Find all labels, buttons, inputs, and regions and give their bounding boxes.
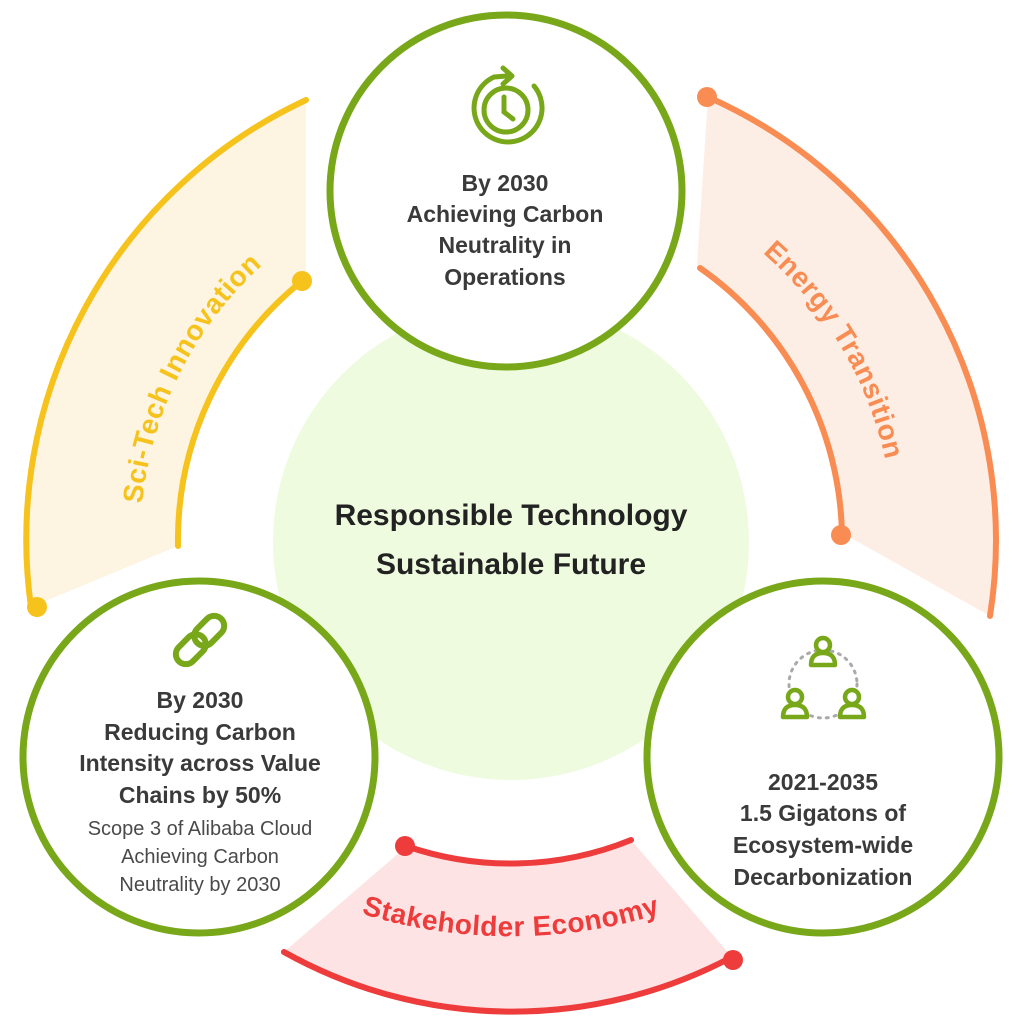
panel: sci-tech innovation arc [23,97,312,617]
panel: bottom-left circle [23,581,375,933]
text: decarbonization goal: 2021-2035 [768,769,878,795]
panel: bottom-right circle [647,581,999,933]
text: value chain goal: Intensity across Value [79,750,321,776]
icon: clock with arrow [474,68,542,142]
icon: people network [783,638,864,718]
text: scope 3 note: Scope 3 of Alibaba Cloud [88,818,312,840]
text: scope 3 note: Neutrality by 2030 [119,874,281,896]
text: decarbonization goal [733,769,913,890]
panel: top circle [330,15,682,367]
text: top goal: Neutrality in [439,232,571,258]
panel: energy transition arc [697,87,999,619]
center circle [273,304,749,780]
text: top goal: Achieving Carbon [407,201,603,227]
text: decarbonization goal: Ecosystem-wide [733,832,913,858]
text: value chain goal: Chains by 50% [119,782,281,808]
panel: energy transition arc: Energy Transition [764,240,899,458]
text: decarbonization goal: Decarbonization [734,864,912,890]
text: value chain goal [79,687,321,808]
panel: stakeholder economy arc: Stakeholder Economy [363,896,656,936]
panel: stakeholder economy arc [281,836,743,1015]
text: value chain goal: Reducing Carbon [104,719,296,745]
panel: sci-tech innovation arc: Sci-Tech Innovation [124,257,261,502]
text: scope 3 note: Achieving Carbon [121,846,279,868]
text: decarbonization goal: 1.5 Gigatons of [740,800,906,826]
text: value chain goal: By 2030 [157,687,243,713]
center title [335,499,688,581]
center title: Sustainable Future [376,548,646,581]
text: top goal: By 2030 [462,170,548,196]
text: scope 3 note [88,818,312,896]
center title: Responsible Technology [335,499,688,532]
text: top goal: Operations [444,264,566,290]
icon: chain link [172,612,228,668]
text: top goal [407,170,603,290]
